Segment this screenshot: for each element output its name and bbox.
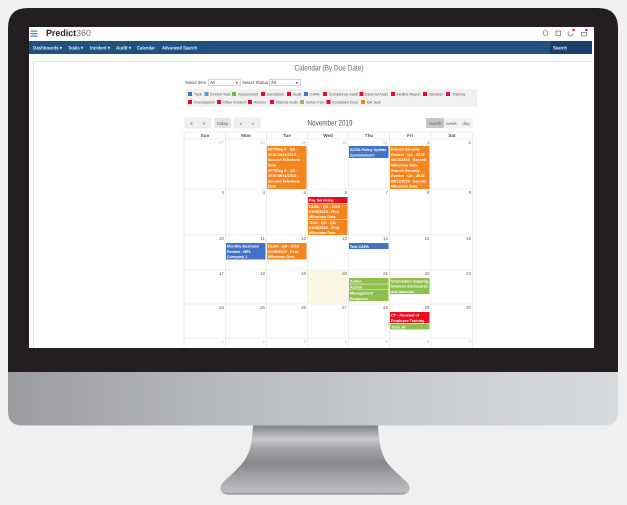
event: Nov 1 orange tasks: Branch Security [391,169,421,173]
navigation bar: Audit ▾ [116,46,131,52]
calendar toolbar: week [446,121,458,126]
day numbers: November: 12 [301,236,307,241]
calendar grid [184,132,472,348]
day numbers: November: 18 [260,271,266,276]
day numbers: other months: 6 [427,339,430,344]
event: Nov 14 test CAPA [349,243,388,249]
filters: Select Item [185,80,206,85]
day numbers: November: 28 [383,305,389,310]
event: Nov 12 GLBA: GLBA - QA - 2019 [268,244,299,248]
app header [30,28,588,38]
event: Oct 31 policy update: Spreadsheet? [350,154,376,158]
monitor chin [8,372,618,426]
day numbers: other months: 4 [345,339,348,344]
filters: ▼ [235,81,238,85]
legend: Compliance Audit [329,92,358,96]
day numbers: other months: 3 [304,339,307,344]
navigation bar: Advanced Search [162,46,197,52]
event: Nov 1 orange tasks: Branch Security [391,148,421,152]
weekday headers: Sat [448,133,456,138]
logo: Predict360 [46,28,91,38]
event: Oct 29 orange tasks: Second Milestone [268,158,300,162]
legend: Investigation [194,100,215,104]
event: Nov 1 orange tasks: 08/11/2019 - Second [391,158,427,162]
icons: header tools [543,29,588,36]
legend: External Audit [365,92,388,96]
monitor bezel [8,8,618,372]
day numbers: November: 29 [425,305,430,310]
day numbers: November: 10 [219,236,225,241]
event: Nov 21 action items [349,278,388,301]
legend: Sanction [429,92,443,96]
day numbers: November: 26 [301,305,307,310]
day numbers: other months: 2 [263,339,266,344]
day numbers: November: 8 [427,190,430,195]
event: Oct 31 policy update: SCRA Policy Update [350,148,386,152]
filters: Select Status [242,80,269,85]
event: Nov 5 pay servicing and QA tasks: Pay Servicing [309,198,334,202]
event: Nov 1 orange tasks: Review - QA - 2019 [391,153,424,157]
screen [29,27,594,348]
weekday headers: Sun [201,133,210,138]
legend: Action Plan [306,100,325,104]
event: Oct 29 orange tasks: Second Milestone [268,179,300,183]
weekday headers: Thu [365,133,373,138]
legend: Assessment [238,92,258,96]
calendar toolbar: month [429,121,442,126]
day numbers: November: 9 [469,190,472,195]
event: Oct 29 orange tasks: SFT/Reg 0 - QD - [268,169,298,173]
day numbers: November: 16 [466,236,472,241]
legend: Internal Audit [276,100,298,104]
day numbers: other months: 30 [342,140,348,145]
day numbers: November: 21 [383,271,389,276]
filters: ▼ [295,81,298,85]
event: Nov 11 monthly review: Monthly Business [227,244,259,248]
day numbers: November: 23 [466,271,472,276]
event: Nov 11 monthly review [226,243,266,260]
monitor stand [220,425,410,494]
event: Nov 22 information mapping: between disclosures [391,284,428,288]
navigation bar [29,41,592,54]
legend: Complaint Case [332,100,358,104]
event: Nov 29 renewal and training: Employee Training [391,319,425,323]
navigation bar: Search [553,46,567,52]
day numbers: November: 4 [263,190,266,195]
title: Calendar (By Due Date) [294,64,364,72]
content panel outline [34,62,592,348]
event: Nov 12 GLBA [267,243,306,260]
day numbers: other months: 1 [222,339,225,344]
legend: Review [254,100,266,104]
weekday headers: Wed [323,133,333,138]
event: Oct 29 orange tasks: SFT/Reg 0 - QD - [268,148,298,152]
event: Nov 22 information mapping [390,278,430,294]
day numbers: November: 13 [342,236,348,241]
event: Nov 1 orange tasks: Milestone Date [391,163,417,167]
day numbers: November: 20 [342,271,348,276]
day numbers: November: 22 [425,271,430,276]
event: Nov 5 pay servicing and QA tasks: 03/09/2019 - First [309,210,340,214]
icon: hamburger menu [30,30,38,37]
event: Nov 21 action items: Action [350,279,362,283]
event: Nov 29 renewal and training: CT - Renewal of [391,314,420,318]
event: Nov 12 GLBA: Milestone Date [268,255,294,259]
day numbers: November: 14 [383,236,389,241]
day numbers: November: 1 [427,140,430,145]
legend: Escalation [267,92,284,96]
day numbers: other months: 29 [301,140,307,145]
day numbers: November: 15 [425,236,430,241]
navigation bar: Dashboards ▾ [33,46,62,52]
weekday headers [201,133,456,138]
legend: Hotline Report [397,92,421,96]
event: Nov 11 monthly review: Company 1 [227,255,247,259]
navigation bar: Calendar [137,46,155,52]
day numbers: November: 19 [301,271,307,276]
event: Nov 21 action items: ACtion [350,286,363,290]
day numbers: November: 7 [386,190,389,195]
calendar toolbar: day [462,121,470,126]
day numbers: November: 3 [222,190,225,195]
event: Nov 21 action items: Response [350,297,368,301]
event: Nov 5 pay servicing and QA tasks: TISA - QO - QA [309,221,336,225]
event: Nov 21 action items: Management [350,292,374,296]
filters: All [271,80,276,85]
legend: Audit [293,92,301,96]
navigation bar: Tasks ▾ [68,46,83,52]
day numbers: November: 25 [260,305,266,310]
day numbers: November: 30 [466,305,472,310]
day numbers: other months: 31 [383,140,389,145]
day numbers: November: 5 [304,190,307,195]
event: Nov 5 pay servicing and QA tasks: Milestone Date [309,215,335,219]
day numbers: other months: 7 [469,339,472,344]
legend: CAPA [310,92,320,96]
legend [185,89,477,107]
event: Oct 29 orange tasks: Date [268,184,276,188]
event: Oct 31 policy update [349,146,388,158]
calendar toolbar: « [240,121,243,126]
event: Oct 29 orange tasks: Date [268,163,276,167]
event: Nov 29 renewal and training: Train JR [391,325,406,329]
filters: All [210,80,215,85]
weekday headers: Mon [241,133,251,138]
event: Nov 5 pay servicing and QA tasks: GLBA - QA - 2019 [309,205,340,209]
month heading: November 2019 [308,118,353,128]
legend: Control Task [210,92,231,96]
day numbers: November [219,140,472,310]
navigation bar: Incident ▾ [90,46,110,52]
calendar toolbar [185,118,473,128]
event: Nov 22 information mapping: Information mapping [391,279,429,283]
legend: Training [452,92,465,96]
event: Nov 14 test CAPA: Test CAPA [350,245,369,249]
event: Nov 1 orange tasks [390,146,430,189]
day numbers: November: 2 [469,140,472,145]
legend: QA Task [367,100,381,104]
calendar toolbar: < [190,121,193,126]
day numbers: November: 17 [219,271,225,276]
calendar toolbar: > [203,121,206,126]
day numbers: November: 11 [260,236,266,241]
day numbers: other months: 5 [386,339,389,344]
event: Nov 22 information mapping: and amounts [391,290,414,294]
weekday headers: Fri [407,133,413,138]
day numbers: other months: 27 [219,140,225,145]
event: Nov 1 orange tasks: Review - QA - 2019 [391,174,424,178]
event: Nov 29 renewal and training [390,312,430,330]
event: Nov 5 pay servicing and QA tasks: 03/09/2019 - First [309,226,340,230]
day numbers: other months [219,140,472,344]
calendar toolbar: today [217,121,229,126]
filters [185,80,300,86]
event: Oct 29 orange tasks [267,146,306,189]
weekday headers: Tue [283,133,291,138]
day numbers: November: 27 [342,305,348,310]
day numbers: other months: 28 [260,140,266,145]
event: Nov 12 GLBA: 03/09/2019 - First [268,250,299,254]
event: Nov 11 monthly review: Review - MPL [227,250,252,254]
event: Oct 29 orange tasks: 2019 08/11/2019 - [268,153,299,157]
event: Nov 1 orange tasks: Milestone Date [391,184,417,188]
day numbers: November: 6 [345,190,348,195]
calendar toolbar: » [252,121,255,126]
day numbers: November: 24 [219,305,225,310]
legend: Other Incident [223,100,246,104]
event: Nov 5 pay servicing and QA tasks: Milestone Date [309,231,335,235]
event: Nov 5 pay servicing and QA tasks [308,197,348,235]
legend: Task [194,92,202,96]
event: Oct 29 orange tasks: 2019 08/11/2019 - [268,174,299,178]
event: Nov 1 orange tasks: 08/11/2019 - Second [391,179,427,183]
